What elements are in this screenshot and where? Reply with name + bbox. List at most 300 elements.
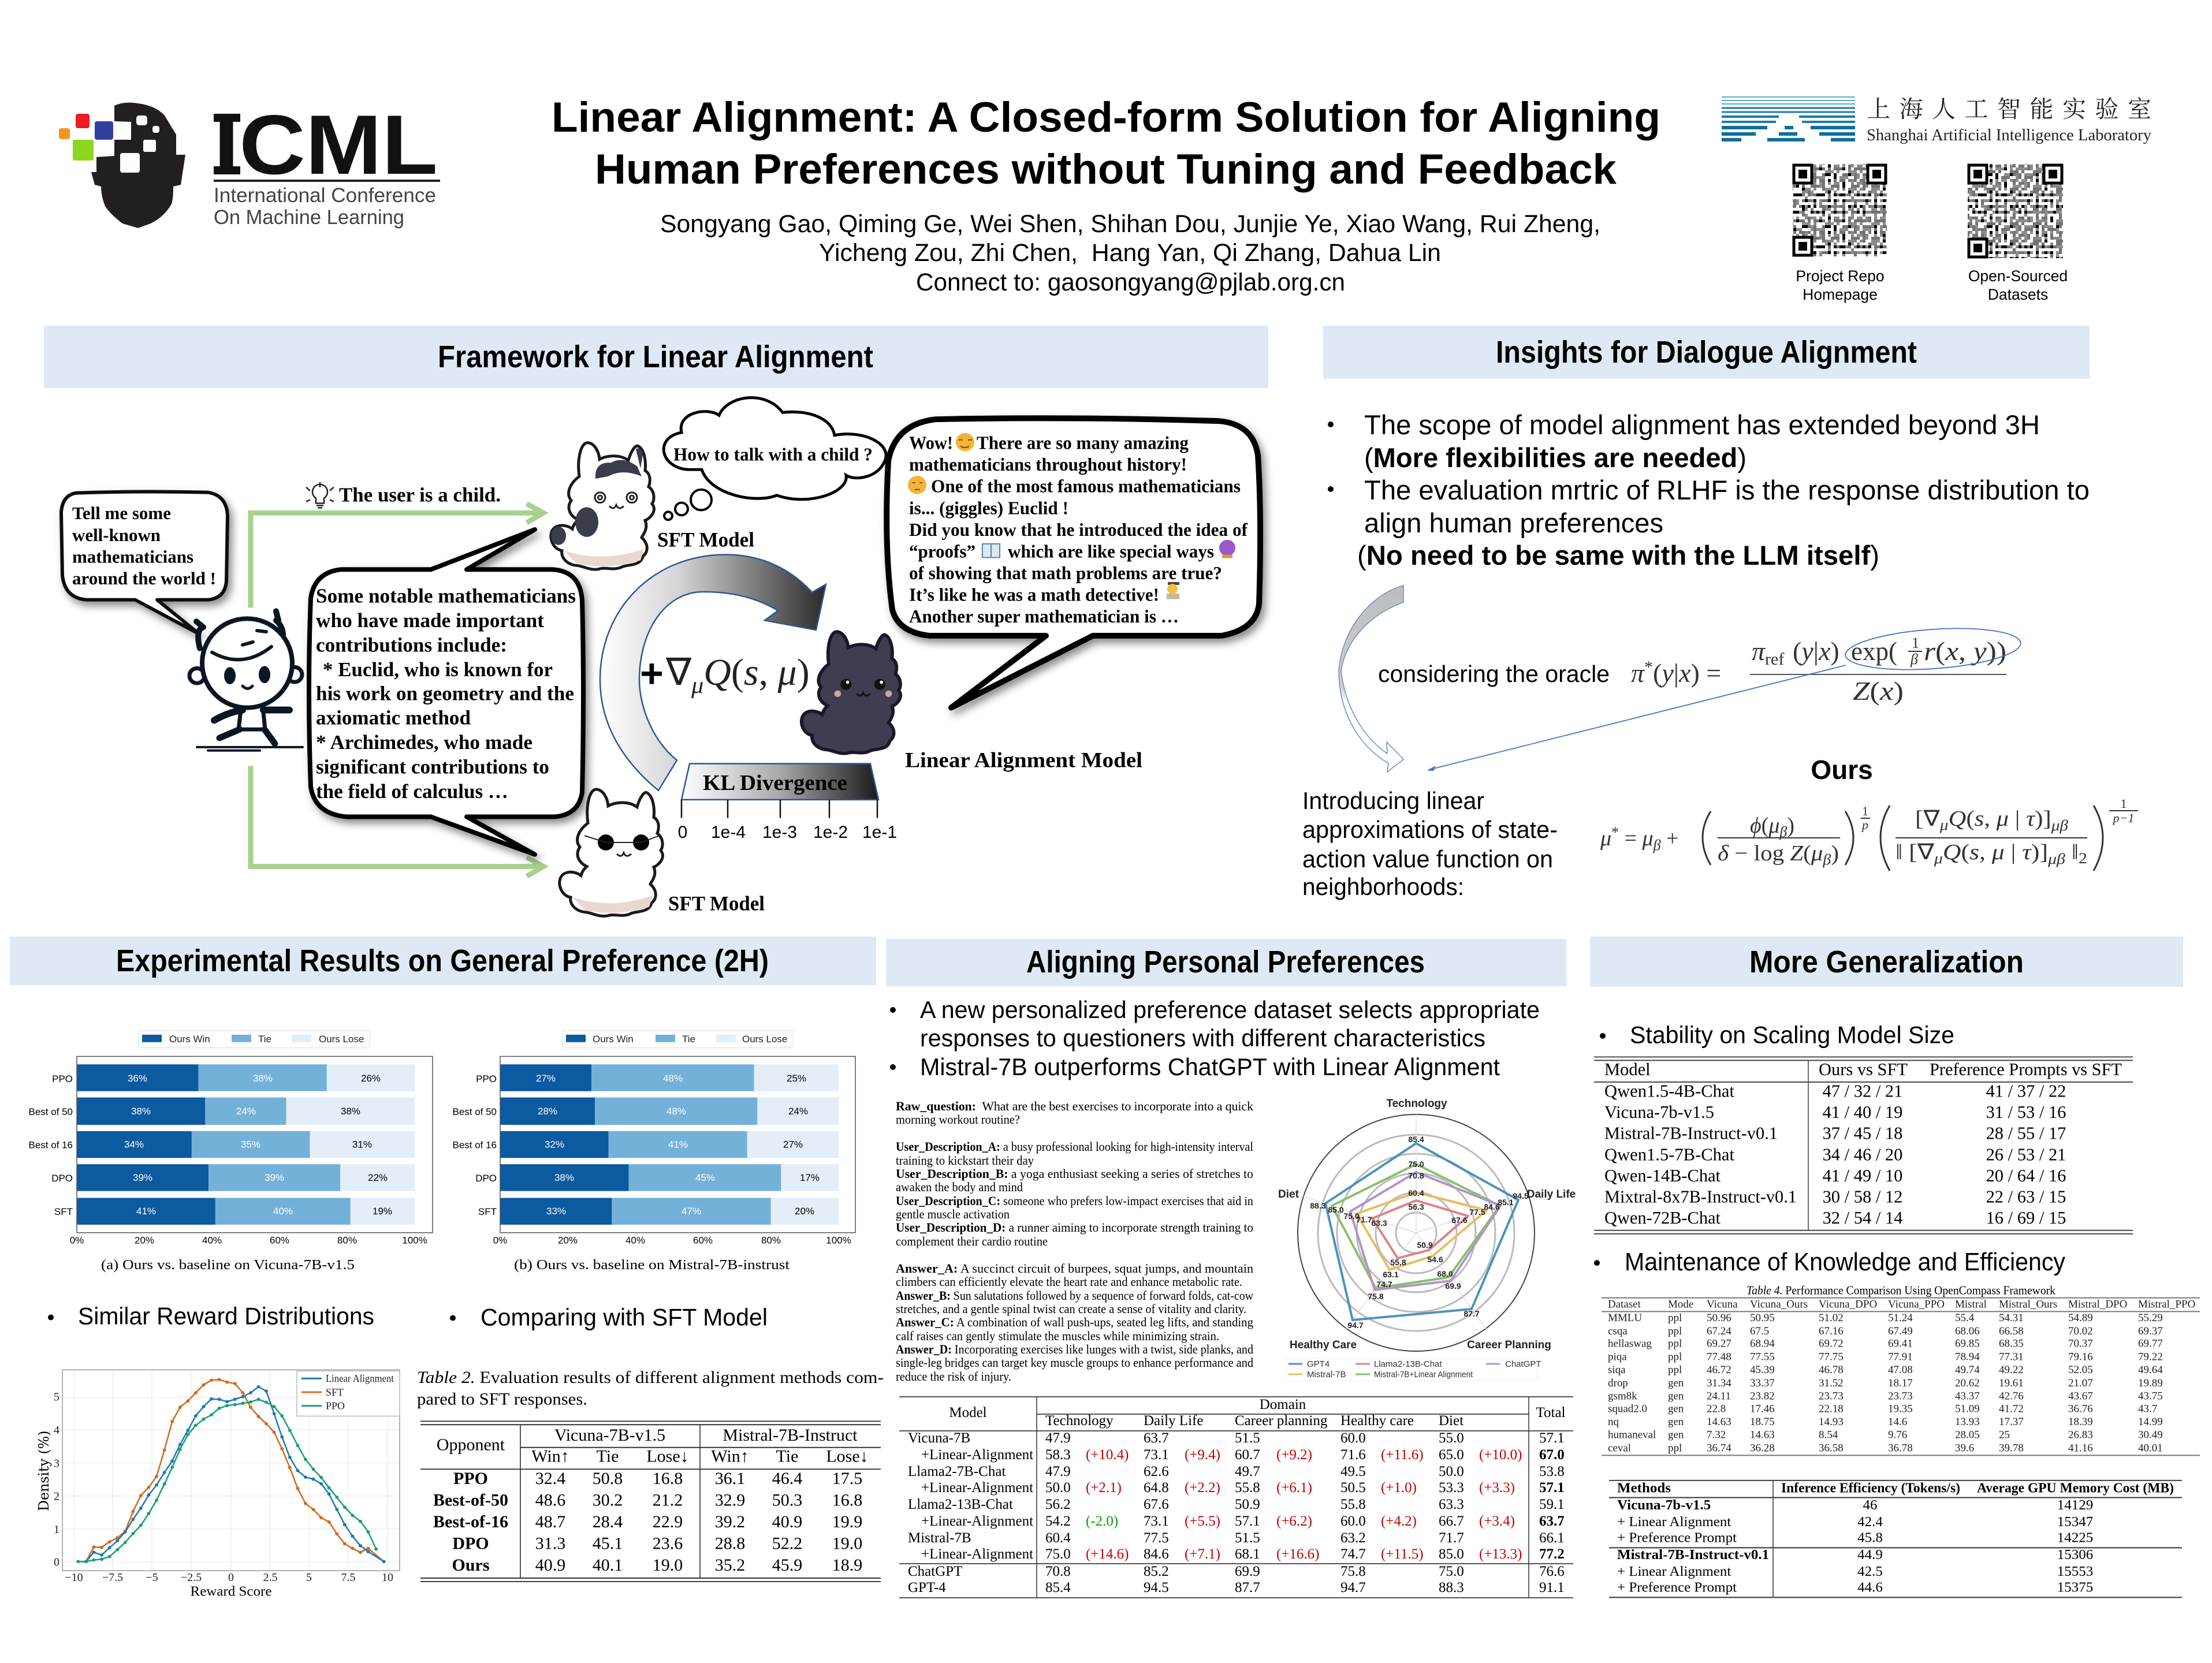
table: domain results: 47.9 (1045, 1464, 1071, 1479)
legend: Tie (258, 1034, 271, 1045)
speech bubble: linear alignment response: is... (giggles) Euclid ! (909, 498, 1068, 518)
row labels: Best of 50 (29, 1106, 73, 1117)
table: comparison with SFT: 22.9 (653, 1512, 683, 1531)
table: OpenCompass performance: Mistral (1955, 1299, 1987, 1310)
table: OpenCompass performance: squad2.0 (1608, 1403, 1647, 1415)
bars (77, 1064, 415, 1225)
table: OpenCompass performance: 79.16 (2068, 1351, 2093, 1363)
table: OpenCompass performance: 9.76 (1888, 1429, 1907, 1441)
formula: gradient term: μ (691, 672, 703, 699)
formula: oracle policy: y|x) = (1662, 658, 1721, 688)
table: OpenCompass performance: MMLU (1608, 1312, 1642, 1324)
caption: user is a child: The user is a child. (339, 484, 501, 506)
table: OpenCompass performance: 14.93 (1819, 1416, 1844, 1428)
table: scaling model size: Qwen1.5-7B-Chat (1604, 1144, 1735, 1164)
table: OpenCompass performance: 77.48 (1707, 1351, 1731, 1363)
text: question, user descriptions and answers: stretches, and a gentle spinal twist can create a sense of vitality and clarity. (896, 1302, 1246, 1316)
bar value labels: 39% (265, 1172, 284, 1183)
table: domain results: 73.1 (1144, 1447, 1169, 1463)
table: OpenCompass performance: 46.78 (1819, 1364, 1844, 1376)
bar value labels: 41% (136, 1206, 156, 1217)
value labels: 68.0 (1437, 1269, 1453, 1278)
speech bubble: SFT answer: his work on geometry and the (316, 683, 574, 705)
legend: Mistral-7B+Linear Alignment (1374, 1370, 1473, 1379)
table: OpenCompass performance: 45.39 (1750, 1364, 1775, 1376)
table: efficiency and memory: Inference Efficiency (Tokens/s) (1781, 1481, 1960, 1496)
y axis ticks: 0 (54, 1556, 59, 1568)
series lines (78, 1379, 384, 1561)
table: OpenCompass performance: 55.4 (1955, 1312, 1975, 1324)
table: domain results: 68.1 (1235, 1546, 1260, 1562)
table: scaling model size: 31 / 53 / 16 (1986, 1102, 2066, 1122)
x axis ticks: 20% (135, 1235, 154, 1246)
table: domain results: 88.3 (1439, 1580, 1464, 1595)
y axis ticks: 2 (54, 1490, 59, 1503)
QR caption: project repo: Homepage (1803, 286, 1878, 303)
table: efficiency and memory: 45.8 (1857, 1530, 1883, 1545)
table: domain results: (+5.5) (1185, 1513, 1220, 1529)
formula: oracle policy: π (1631, 658, 1645, 688)
table: domain results: 87.7 (1235, 1580, 1260, 1595)
table: OpenCompass performance: 66.58 (1999, 1325, 2024, 1337)
table: domain results: Vicuna-7B (908, 1430, 970, 1446)
text: question, user descriptions and answers: Answer_A: A succinct circuit of burpees, squat jumps, and mountain (896, 1261, 1253, 1276)
bar value labels: 19% (373, 1206, 392, 1217)
table: scaling model size: 16 / 69 / 15 (1986, 1208, 2066, 1228)
table: OpenCompass performance: 77.55 (1750, 1351, 1775, 1363)
heading: framework: Framework for Linear Alignment (438, 340, 873, 374)
table: OpenCompass performance: gen (1668, 1377, 1684, 1389)
table: OpenCompass performance: 43.67 (2068, 1390, 2093, 1402)
row labels: Best of 50 (453, 1106, 497, 1117)
value labels: 63.1 (1383, 1270, 1399, 1279)
text: question, user descriptions and answers: Answer_D: Incorporating exercises like lunges with a twist, side planks, and (896, 1342, 1253, 1356)
bar value labels (536, 1073, 820, 1217)
formula: oracle policy: exp( (1851, 636, 1897, 666)
table: domain results: Llama2-7B-Chat (908, 1464, 1006, 1479)
table: domain results: GPT-4 (908, 1580, 946, 1595)
table: comparison with SFT: Tie (776, 1447, 798, 1466)
formula: closed-form solution: β (1822, 851, 1831, 868)
text: considering the oracle: considering the oracle (1378, 661, 1610, 687)
table: domain results: 53.8 (1539, 1464, 1565, 1479)
legend: GPT4 (1307, 1359, 1330, 1369)
table: domain results: Diet (1439, 1413, 1464, 1429)
value labels: 60.4 (1408, 1188, 1424, 1198)
table: OpenCompass performance: 49.22 (1999, 1364, 2024, 1376)
table: domain results: (+2.2) (1185, 1480, 1220, 1496)
table: scaling model size: Ours vs SFT (1819, 1060, 1908, 1079)
speech bubble: linear alignment response: Did you know that he introduced the idea of (909, 520, 1247, 540)
table: comparison with SFT: Opponent (437, 1435, 505, 1455)
title: Linear Alignment: A Closed-form Solution for Aligning (552, 94, 1660, 141)
table: comparison with SFT: 36.1 (715, 1469, 745, 1488)
table: OpenCompass performance: 14.6 (1888, 1416, 1907, 1428)
speech bubble: SFT answer: * Euclid, who is known for (323, 658, 553, 681)
table: domain results: 73.1 (1144, 1513, 1169, 1529)
icon: SFT llama upper (551, 443, 654, 569)
table: OpenCompass performance: gsm8k (1608, 1390, 1637, 1402)
table: domain results: 50.5 (1340, 1480, 1366, 1496)
table: comparison with SFT: PPO (453, 1469, 488, 1488)
table: efficiency and memory: 14129 (2057, 1497, 2093, 1513)
value labels (1310, 1135, 1529, 1330)
table: domain results: (+14.6) (1086, 1546, 1129, 1562)
speech bubble: linear alignment response: “proofs” (909, 542, 975, 561)
formula: oracle policy: ref (1765, 650, 1784, 669)
table: OpenCompass performance: 77.31 (1999, 1351, 2024, 1363)
formula: closed-form solution: Q (1943, 840, 1961, 864)
table: OpenCompass performance: 23.73 (1819, 1390, 1844, 1402)
table: OpenCompass performance: 42.76 (1999, 1390, 2024, 1402)
table: comparison with SFT (420, 1421, 881, 1582)
speech bubble: user question: mathematicians (72, 547, 193, 566)
table: comparison with SFT: 50.8 (593, 1469, 623, 1488)
table: domain results: 60.0 (1340, 1513, 1366, 1529)
table: OpenCompass performance: 46.72 (1707, 1364, 1731, 1376)
table: OpenCompass performance: 55.29 (2138, 1312, 2163, 1324)
table: OpenCompass performance: 54.31 (1999, 1312, 2024, 1324)
value labels: 85.0 (1328, 1205, 1344, 1214)
table: comparison with SFT: 35.2 (715, 1556, 745, 1575)
table: comparison with SFT: 40.1 (593, 1556, 623, 1575)
text: question, user descriptions and answers: reduce the risk of injury. (896, 1369, 1011, 1384)
table: comparison with SFT: Win↑ (711, 1447, 749, 1466)
legend: Ours Win (169, 1034, 210, 1045)
row labels: Best of 16 (453, 1140, 497, 1150)
bar value labels: 36% (128, 1073, 147, 1084)
table: OpenCompass performance: ceval (1608, 1442, 1631, 1454)
table: comparison with SFT: 39.2 (715, 1512, 745, 1531)
bar value labels: 24% (788, 1106, 808, 1117)
value labels: 71.7 (1356, 1215, 1372, 1224)
table: OpenCompass performance: csqa (1608, 1325, 1628, 1337)
table: domain results: 85.0 (1439, 1546, 1464, 1562)
table: efficiency and memory: Methods (1617, 1481, 1671, 1496)
heading: more generalization (1590, 937, 2183, 987)
bar value labels: 20% (795, 1206, 814, 1217)
x axis ticks: 5 (306, 1571, 312, 1584)
value labels: 70.8 (1408, 1171, 1424, 1180)
table: scaling model size: 41 / 37 / 22 (1986, 1082, 2066, 1101)
bullets: dialogue alignment insights: align human preferences (1364, 508, 1663, 538)
title: Human Preferences without Tuning and Feedback (595, 146, 1617, 193)
y axis ticks: 1 (54, 1523, 59, 1536)
speech bubble: SFT answer: significant contributions to (316, 756, 549, 778)
QR code: datasets (1968, 164, 2063, 258)
table: OpenCompass performance: ppl (1668, 1351, 1682, 1363)
icon: book emoji (982, 544, 1000, 557)
formula: gradient term (640, 651, 810, 699)
table: domain results: 71.7 (1439, 1530, 1464, 1546)
table: comparison with SFT: 52.2 (772, 1534, 802, 1553)
table: domain results: 62.6 (1144, 1464, 1169, 1479)
x axis ticks (70, 1235, 427, 1246)
text: linear approximations: approximations of state- (1302, 816, 1558, 843)
table: OpenCompass performance: 17.46 (1750, 1403, 1775, 1415)
table: comparison with SFT: 32.4 (535, 1469, 565, 1488)
axis labels: Daily Life (1527, 1188, 1576, 1200)
bar value labels: 33% (546, 1206, 566, 1217)
table: efficiency and memory: + Linear Alignment (1617, 1514, 1731, 1530)
table: domain results: 94.5 (1144, 1580, 1169, 1595)
table: comparison with SFT: 19.9 (832, 1512, 862, 1531)
value labels: 50.9 (1417, 1240, 1433, 1250)
x axis ticks: 100% (826, 1235, 851, 1246)
bullets: personal preferences: A new personalized preference dataset selects appropriate (920, 996, 1540, 1023)
value labels: 67.6 (1451, 1215, 1468, 1225)
scale: KL divergence: KL Divergence (703, 771, 847, 795)
icon: light bulb (306, 482, 334, 508)
text: linear approximations: Introducing linear (1302, 787, 1484, 814)
formula: closed-form solution: 1 (2121, 796, 2127, 811)
table: OpenCompass performance: ppl (1668, 1364, 1682, 1376)
value labels: 85.4 (1408, 1135, 1424, 1144)
formula: oracle policy: (y|x) (1793, 636, 1839, 666)
text: question, user descriptions and answers (896, 1099, 1253, 1384)
icon: striped lab logo (1722, 97, 1855, 140)
table: OpenCompass performance: 14.63 (1707, 1416, 1731, 1428)
row labels: PPO (52, 1073, 73, 1084)
table: OpenCompass performance: 67.16 (1819, 1325, 1844, 1337)
table: domain results: 50.9 (1235, 1497, 1260, 1512)
bar value labels: 34% (124, 1139, 144, 1150)
speech bubble: linear alignment response: It’s like he was a math detective! (909, 585, 1159, 605)
table: domain results: 77.2 (1539, 1546, 1565, 1562)
value labels: 75.0 (1343, 1211, 1360, 1221)
QR caption: project repo (1796, 267, 1885, 303)
table: comparison with SFT: 48.6 (535, 1491, 565, 1509)
table: domain results: 51.5 (1235, 1430, 1260, 1446)
table: domain results: 50.0 (1045, 1480, 1071, 1496)
legend (297, 1371, 400, 1416)
table: OpenCompass performance: 70.02 (2068, 1325, 2093, 1337)
table: domain results: (+3.3) (1479, 1480, 1515, 1496)
x axis ticks (65, 1571, 393, 1584)
QR caption: datasets (1968, 267, 2068, 303)
chart: radar (1278, 1098, 1576, 1381)
speech bubble: SFT answer: axiomatic method (316, 706, 471, 729)
table: OpenCompass performance: 67.5 (1750, 1325, 1769, 1337)
table: scaling model size: 32 / 54 / 14 (1823, 1208, 1902, 1228)
table: OpenCompass performance (1602, 1298, 2200, 1455)
table: domain results: (+11.6) (1381, 1447, 1424, 1463)
table: scaling model size: Qwen-14B-Chat (1604, 1166, 1721, 1185)
x axis ticks: 40% (625, 1235, 645, 1246)
thought cloud (664, 398, 886, 520)
formula: closed-form solution: ‖ [∇ (1896, 840, 1929, 864)
table: domain results: 60.0 (1340, 1430, 1366, 1446)
table: domain results: 55.8 (1340, 1497, 1366, 1512)
table: comparison with SFT: 50.3 (772, 1491, 802, 1509)
table: domain results: (-2.0) (1086, 1513, 1118, 1529)
table: domain results: (+7.1) (1185, 1546, 1220, 1562)
table: comparison with SFT: 45.9 (772, 1556, 802, 1575)
formula: oracle policy: β (1910, 651, 1918, 668)
QR caption: project repo: Project Repo (1796, 267, 1885, 285)
icon: detective emoji (1167, 582, 1179, 599)
table: OpenCompass performance: Vicuna_Ours (1750, 1299, 1808, 1310)
bar value labels: 31% (352, 1139, 372, 1150)
caption: chart a: (a) Ours vs. baseline on Vicuna-7B-v1.5 (101, 1257, 355, 1273)
table: domain results: Career planning (1235, 1413, 1328, 1429)
table: scaling model size: 34 / 46 / 20 (1823, 1144, 1902, 1164)
bullets: personal preferences: responses to questioners with different characteristics (920, 1024, 1485, 1052)
text: linear approximations (1302, 787, 1558, 900)
icon: dark llama linear alignment (802, 632, 900, 754)
bar value labels: 47% (682, 1206, 701, 1217)
text: linear approximations: action value function on (1302, 845, 1553, 872)
x axis ticks: 60% (693, 1235, 713, 1246)
table: comparison with SFT: 31.3 (535, 1534, 565, 1553)
formula: closed-form solution: [∇ (1915, 807, 1937, 831)
table: domain results: (+9.4) (1185, 1447, 1220, 1463)
table: comparison with SFT: Ours (452, 1556, 489, 1575)
table: OpenCompass performance: Vicuna_DPO (1819, 1299, 1877, 1310)
arrow: upper green connector (251, 504, 543, 608)
table: OpenCompass performance: 18.75 (1750, 1416, 1775, 1428)
table: domain results: 57.1 (1539, 1480, 1565, 1496)
panel: insights (1302, 409, 2138, 900)
y axis ticks: 4 (54, 1424, 59, 1437)
table: domain results: 59.1 (1539, 1497, 1565, 1512)
table: efficiency and memory: + Linear Alignment (1617, 1564, 1731, 1579)
formula: gradient term: ∇ (666, 652, 691, 693)
table: domain results (899, 1397, 1573, 1598)
arrow: lower green connector (251, 766, 543, 876)
chart: stacked bars Vicuna (29, 1031, 433, 1246)
caption: chart b: (b) Ours vs. baseline on Mistral-7B-instrust (514, 1257, 790, 1273)
table: comparison with SFT: 48.7 (535, 1512, 565, 1531)
table: efficiency and memory: Mistral-7B-Instruct-v0.1 (1617, 1547, 1769, 1563)
table: domain results: (+10.4) (1086, 1447, 1129, 1463)
text: question, user descriptions and answers: User_Description_C: someone who prefers low-impact exercises that aid in (896, 1194, 1253, 1208)
icon: SFT llama lower with glasses (560, 789, 662, 916)
table: OpenCompass performance: ppl (1668, 1325, 1682, 1337)
formula: oracle policy: π (1752, 636, 1765, 666)
formula: oracle policy: Z(x) (1853, 676, 1904, 706)
table: domain results: (+16.6) (1276, 1546, 1319, 1562)
table: domain results: 75.0 (1439, 1564, 1464, 1579)
table: domain results: 94.7 (1340, 1580, 1366, 1595)
value labels: 88.3 (1310, 1201, 1326, 1210)
table: OpenCompass performance: 69.41 (1888, 1338, 1913, 1350)
value labels: 94.7 (1347, 1321, 1364, 1330)
table: efficiency and memory: 15306 (2057, 1547, 2093, 1563)
x axis ticks: 10 (382, 1571, 393, 1584)
table: OpenCompass performance: 77.75 (1819, 1351, 1844, 1363)
panel: scaling stability (1594, 1021, 2133, 1276)
bullets: dialogue alignment insights: The scope of model alignment has extended beyond 3H (1364, 409, 2040, 440)
arrow: gradient curved arrow (600, 555, 826, 791)
table: OpenCompass performance: 22.8 (1707, 1403, 1726, 1415)
table: OpenCompass performance: 68.35 (1999, 1338, 2024, 1350)
table: OpenCompass performance: 31.34 (1707, 1377, 1731, 1389)
table: domain results: 63.7 (1539, 1513, 1565, 1529)
table: scaling model size: 20 / 64 / 16 (1986, 1166, 2066, 1185)
table: OpenCompass performance: 33.37 (1750, 1377, 1775, 1389)
formula: closed-form solution: 1 (1862, 804, 1868, 818)
bar value labels: 39% (133, 1172, 152, 1183)
table: domain results: Mistral-7B (908, 1530, 971, 1546)
text: question, user descriptions and answers: awaken the body and mind (896, 1180, 1023, 1194)
value labels: 94.5 (1513, 1191, 1529, 1200)
callout: ellipse and pointer line (1428, 623, 2022, 770)
table: comparison with SFT: 16.8 (832, 1491, 862, 1509)
table: OpenCompass performance: gen (1668, 1403, 1684, 1415)
formula: closed-form solution (1600, 796, 2138, 871)
formula: closed-form solution: 2 (2079, 850, 2087, 867)
table: domain results: 57.1 (1539, 1430, 1565, 1446)
table: OpenCompass performance: 51.24 (1888, 1312, 1913, 1324)
formula: closed-form solution: + (1661, 826, 1678, 851)
value labels: 75.0 (1408, 1159, 1424, 1169)
caption: table 2: Table 2. Evaluation results of different alignment methods com- (417, 1368, 884, 1387)
bullets: dialogue alignment insights (1328, 409, 2090, 571)
table: domain results: (+3.4) (1479, 1513, 1515, 1529)
table: comparison with SFT: 40.9 (772, 1512, 802, 1531)
table: OpenCompass performance: piqa (1608, 1351, 1627, 1363)
caption: table 2 (417, 1368, 884, 1409)
table: scaling model size: Mistral-7B-Instruct-v0.1 (1604, 1124, 1778, 1143)
bar value labels: 38% (341, 1106, 360, 1117)
authors and contact (660, 210, 1600, 296)
table: OpenCompass performance: 43.37 (1955, 1390, 1980, 1402)
label: ours: Ours (1811, 755, 1873, 785)
series polygons (1325, 1143, 1518, 1320)
chart: reward density lines (36, 1370, 400, 1599)
value labels: 54.6 (1427, 1255, 1443, 1264)
table: domain results: +Linear-Alignment (921, 1546, 1033, 1562)
legend: Ours Win (593, 1034, 634, 1045)
table: OpenCompass performance: 7.32 (1707, 1429, 1726, 1441)
thought cloud: How to talk with a child ? (673, 445, 873, 464)
text: question, user descriptions and answers: climbers can efficiently elevate the heart rate and enhance metabolic rate. (896, 1274, 1242, 1289)
table: efficiency and memory: 46 (1863, 1497, 1877, 1513)
label: SFT model upper: SFT Model (657, 528, 754, 551)
x axis ticks: 60% (270, 1235, 289, 1246)
table: domain results: 47.9 (1045, 1430, 1071, 1446)
text: question, user descriptions and answers: User_Description_A: a busy professional looking for high-intensity interval (896, 1139, 1253, 1154)
table: OpenCompass performance: 28.05 (1955, 1429, 1980, 1441)
x axis ticks: −7.5 (102, 1571, 123, 1584)
speech bubble: SFT answer: * Archimedes, who made (316, 731, 532, 754)
table: OpenCompass performance: 17.37 (1999, 1416, 2024, 1428)
value labels: 56.3 (1408, 1202, 1424, 1211)
caption: table 4: Table 4. Performance Comparison Using OpenCompass Framework (1746, 1284, 2056, 1297)
y axis ticks (54, 1391, 59, 1568)
table: OpenCompass performance: gen (1668, 1390, 1684, 1402)
table: domain results: (+6.2) (1276, 1513, 1312, 1529)
table: domain results: (+4.2) (1381, 1513, 1417, 1529)
table: OpenCompass performance: Mistral_PPO (2138, 1299, 2195, 1310)
arrow: curved grey arrow (1339, 586, 1403, 772)
panel: general preference bar charts (29, 1031, 855, 1273)
heading: framework (44, 326, 1268, 388)
table: OpenCompass performance: 69.37 (2138, 1325, 2163, 1337)
bullets: personal preferences (890, 996, 1540, 1080)
formula: closed-form solution: Q (1949, 807, 1966, 831)
bullets: personal preferences: Mistral-7B outperforms ChatGPT with Linear Alignment (920, 1053, 1500, 1080)
bullet: comparing with SFT: Comparing with SFT Model (481, 1304, 768, 1330)
table: OpenCompass performance: 39.6 (1955, 1442, 1974, 1454)
text: question, user descriptions and answers: complement their cardio routine (896, 1234, 1048, 1248)
table: comparison with SFT: 23.6 (653, 1534, 683, 1553)
table: scaling model size: Mixtral-8x7B-Instruct-v0.1 (1604, 1187, 1797, 1206)
bullet: knowledge and efficiency: Maintenance of Knowledge and Efficiency (1625, 1248, 2065, 1276)
heading: insights (1323, 326, 2090, 379)
chart: stacked bars Mistral (453, 1031, 855, 1246)
